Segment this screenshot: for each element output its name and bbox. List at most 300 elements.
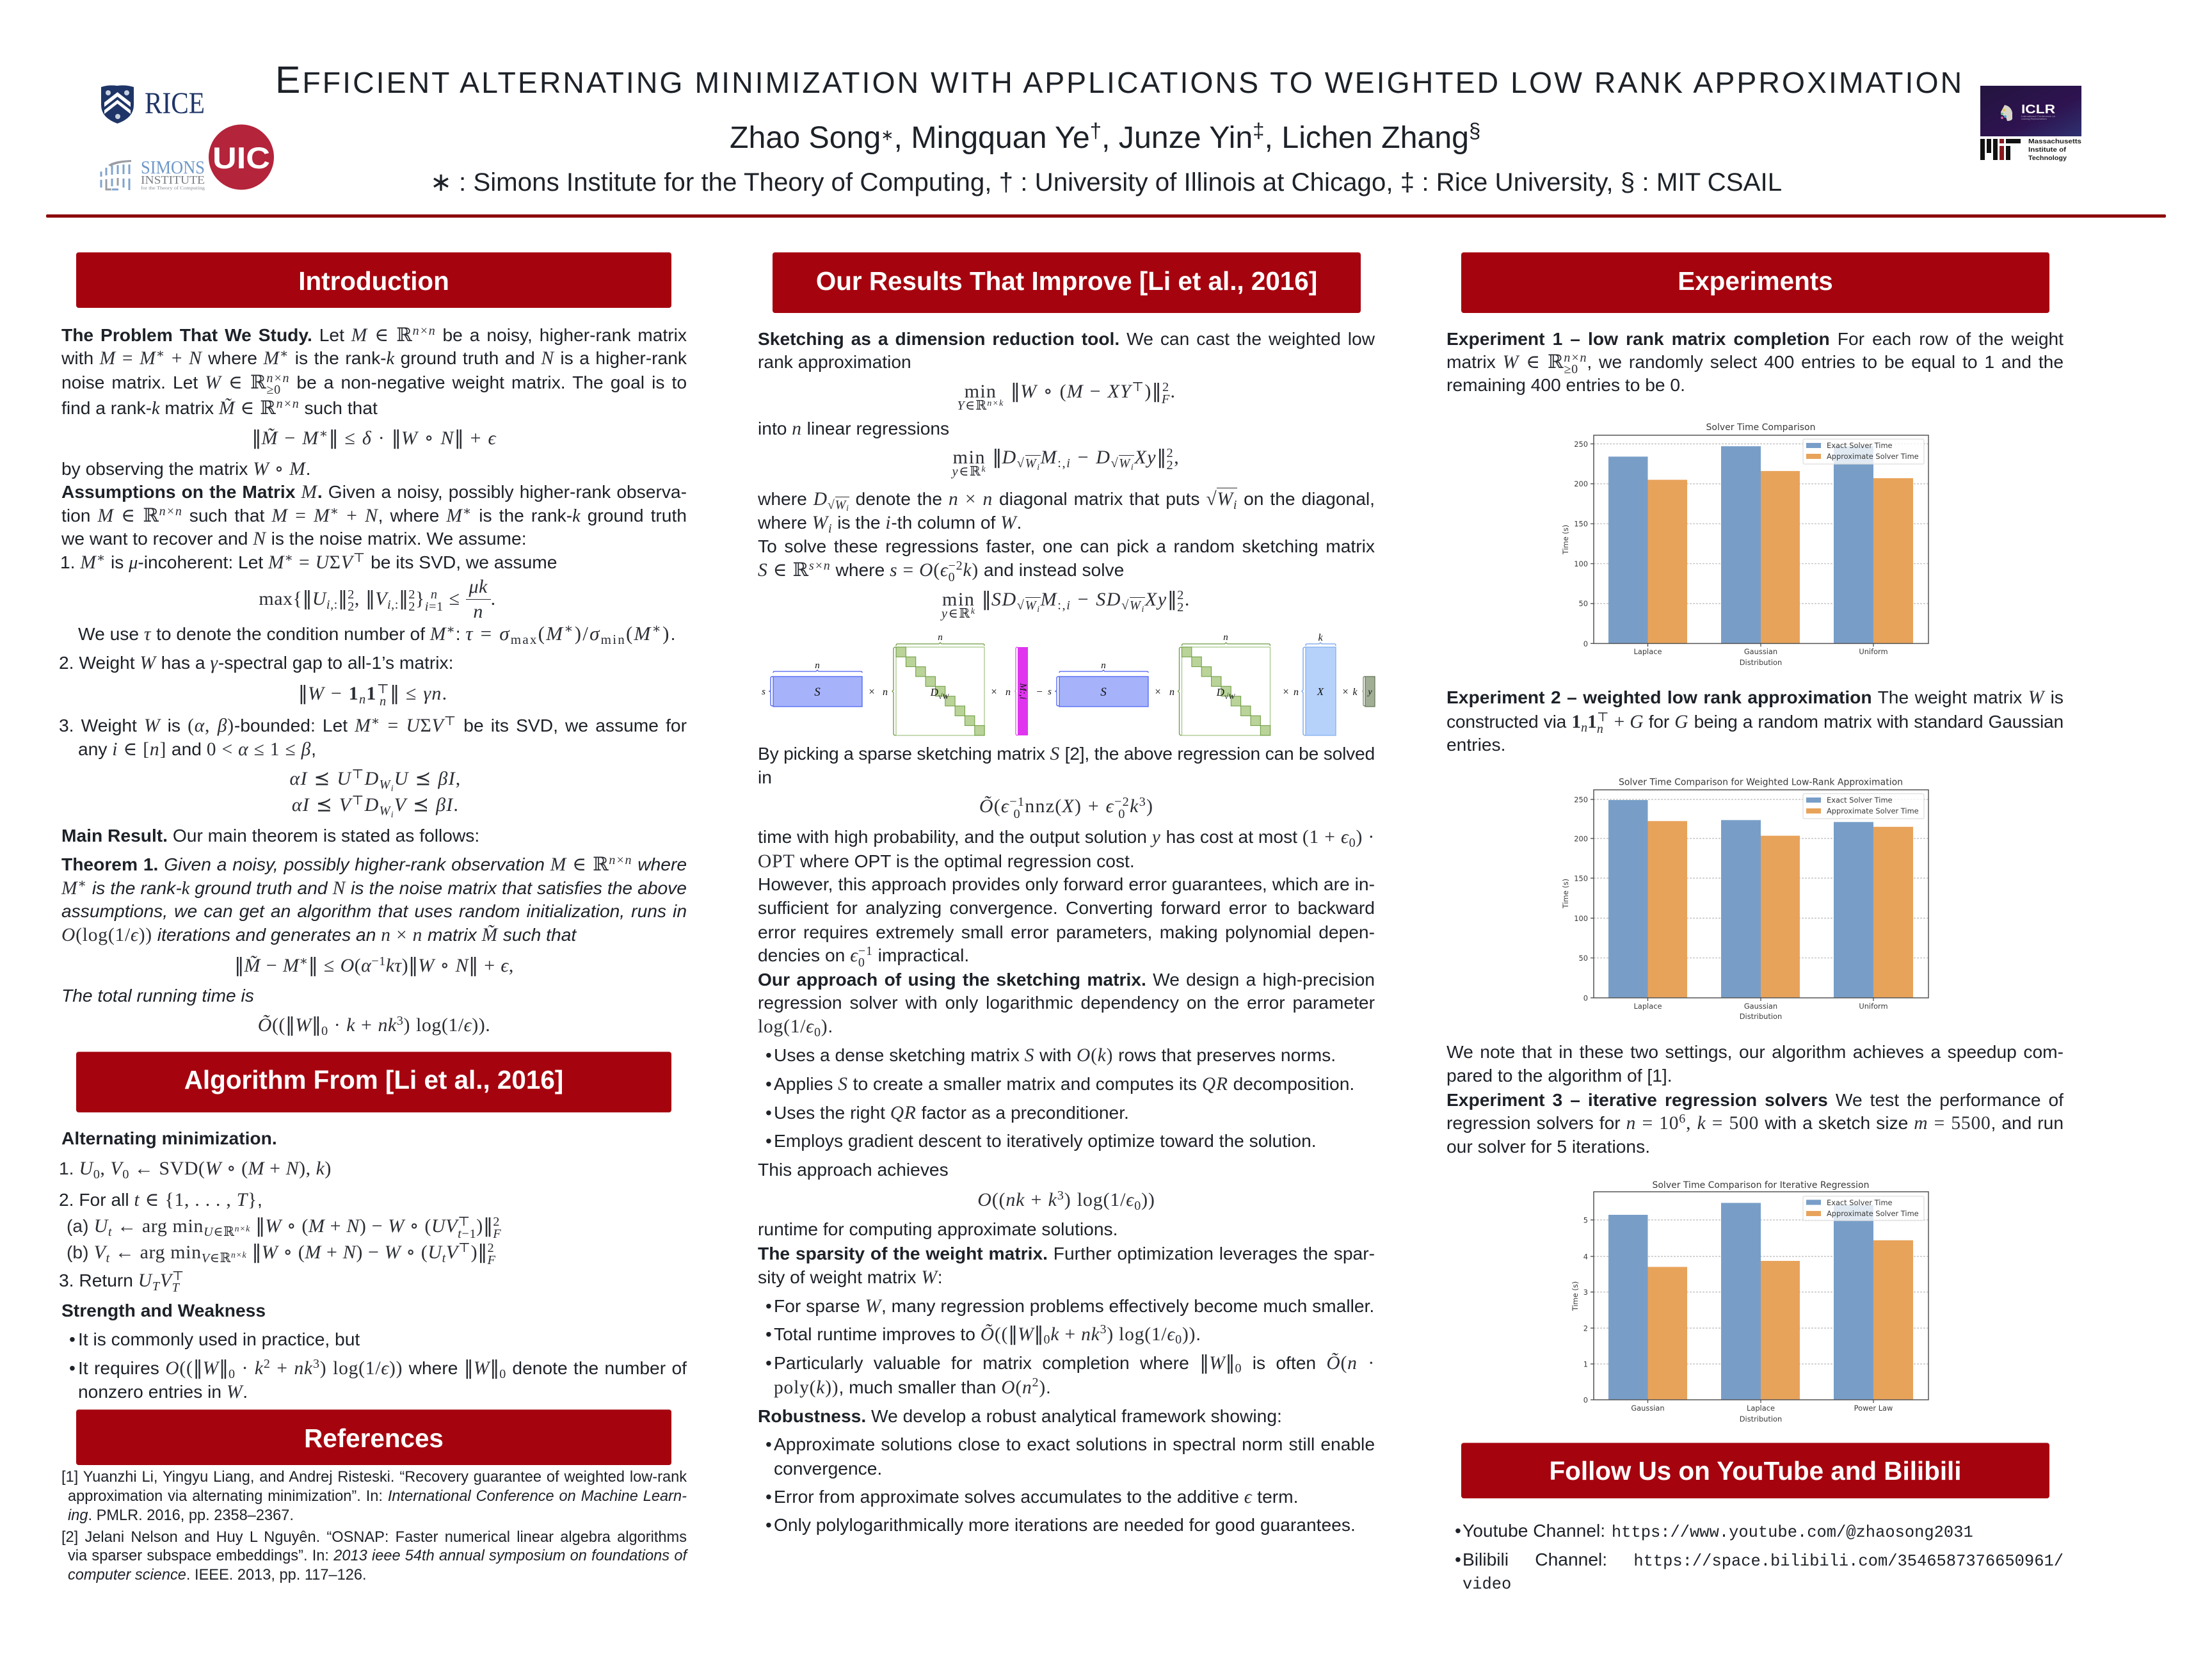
matrix X: × [1342, 685, 1349, 698]
y axis labels [1583, 1216, 1873, 1404]
algorithm steps: T [172, 1281, 180, 1295]
algorithm steps: 2 [493, 1215, 500, 1229]
y axis labels: 5 [1583, 1216, 1588, 1225]
y axis labels: 0 [1583, 639, 1588, 648]
y axis labels: 200 [1574, 479, 1588, 488]
list item 3: bounded weight: any i ∈ [n] and 0 < α ≤ 1 ≤ β, [78, 739, 316, 760]
text block: our approach: • [765, 1073, 772, 1094]
y axis labels [1574, 440, 1873, 648]
references list: [1] Yuanzhi Li, Yingyu Liang, and Andrej Risteski. “Recovery guarantee of weighted low-rank [61, 1469, 687, 1486]
matrix D left: n [938, 632, 943, 643]
text block: our approach [758, 969, 1375, 1239]
y axis labels: 250 [1574, 440, 1588, 449]
text block: the problem that we study [61, 324, 687, 479]
text block: experiment 2 [1447, 687, 2064, 755]
list item 3: bounded weight [59, 714, 687, 820]
text block: the problem that we study: by observing the matrix W ∘ M. [61, 458, 310, 479]
y axis labels: 1 [1583, 1359, 1588, 1368]
algorithm steps: Alternating minimization. [61, 1128, 277, 1148]
text block: speedup note and experiment 3: Experiment 3 – iterative regression solvers We test the performance of [1447, 1089, 2064, 1110]
y axis labels [1574, 795, 1873, 1002]
matrix D left: D [931, 686, 938, 698]
x axis labels: Gaussian [1744, 647, 1777, 656]
matrix D right: × [1283, 685, 1289, 698]
x axis labels: Laplace [1634, 647, 1662, 656]
list item 1: incoherence: i=1 [425, 600, 444, 614]
matrix X: k [1352, 687, 1358, 698]
text block: robustness: • [765, 1486, 772, 1507]
x axis labels [1631, 1404, 1893, 1423]
text block: sparse sketching solution: −2 [1114, 795, 1130, 809]
text block: forward error limitation: 0 [858, 956, 865, 970]
text block: experiment 2: constructed via 1n1 + G for G being a random matrix with standard Gaussian [1447, 711, 2064, 735]
text block: speedup note and experiment 3 [1447, 1041, 2064, 1157]
text block: sketching as a dimension reduction tool: y∈ℝk [952, 465, 986, 479]
matrix S left [762, 661, 888, 707]
text block: the problem that we study: noise matrix. Let W ∈ ℝ be a non-negative weight matrix. The goal is to [61, 372, 687, 393]
section header: Follow Us: Follow Us on YouTube and Bilibili [1549, 1456, 1961, 1486]
y axis labels: 200 [1574, 835, 1588, 844]
chart: iterative regression comparison [1571, 1180, 1929, 1423]
text block: experiment 2: entries. [1447, 734, 1505, 755]
theorem 1: O(log(1/ϵ)) iterations and generates an n × n matrix M̃ such that [61, 924, 576, 945]
logo: UIC [209, 124, 274, 189]
text block: sparsity of the weight matrix: Particularly valuable for matrix completion where ‖W‖0 is often Õ(n · [774, 1352, 1375, 1375]
plot frame [1594, 435, 1928, 643]
text block: our approach: Uses the right QR factor as a preconditioner. [774, 1102, 1129, 1123]
text block: sketching as a dimension reduction tool: 2 [1166, 446, 1174, 460]
text block: the problem that we study: ≥0 [266, 383, 281, 397]
algorithm steps: 1. U0, V0 ← SVD(W ∘ (M + N), k) [59, 1158, 332, 1182]
text block: assumptions on the matrix: we want to recover and N is the noise matrix. We assume: [61, 528, 527, 549]
text block: sketching as a dimension reduction tool: Y∈ℝn×k [957, 399, 1004, 413]
text block: sparsity of the weight matrix: sity of weight matrix W: [758, 1267, 943, 1288]
y axis labels: 0 [1583, 993, 1588, 1002]
list item 1: incoherence: μk [469, 576, 488, 597]
y axis labels: 100 [1574, 559, 1588, 568]
legend: Approximate Solver Time [1827, 1209, 1919, 1218]
bars [1608, 446, 1913, 643]
matrix D right: n [1223, 632, 1228, 643]
matrix D left: √W [938, 692, 949, 701]
logo: MIT: Technology [2028, 154, 2067, 162]
text block: the problem that we study: find a rank-k matrix M̃ ∈ ℝn×n such that [61, 397, 378, 419]
x axis labels: Uniform [1859, 647, 1888, 656]
legend: Approximate Solver Time [1827, 806, 1919, 815]
matrix X [1302, 632, 1358, 735]
text block: experiment 2: n [1597, 722, 1603, 736]
text block: forward error limitation: −1 [858, 944, 873, 958]
y axis labels: 150 [1574, 874, 1588, 883]
theorem 1: Õ((‖W‖0 · k + nk3) log(1/ϵ)). [258, 1014, 490, 1038]
text block: our approach: This approach achieves [758, 1159, 949, 1180]
section header: Our Results [773, 252, 1361, 313]
vector M column: M:,i [1018, 682, 1028, 700]
theorem 1: The total running time is [61, 985, 254, 1006]
matrix S right: n [1169, 687, 1174, 698]
text block: main result: Main Result. Our main theorem is stated as follows: [61, 825, 479, 846]
section header: Our Results: Our Results That Improve [Li et al., 2016] [816, 266, 1317, 296]
legend: Exact Solver Time [1827, 441, 1893, 450]
grid [1594, 799, 1928, 958]
x axis labels: Distribution [1740, 1415, 1782, 1423]
text block: sketching as a dimension reduction tool: min [965, 381, 997, 402]
theorem 1: assumptions, we can get an algorithm that uses random initialization, runs in [61, 901, 687, 921]
algorithm steps: 2. For all t ∈ {1, . . . , T}, [59, 1189, 262, 1210]
logo: Simons Institute: INSTITUTE [141, 173, 205, 186]
text block: sparsity of the weight matrix [758, 1243, 1375, 1398]
text block: sparse sketching solution: time with high probability, and the output solution y has cost at most (1 + ϵ0) · [758, 826, 1375, 850]
y axis labels: 100 [1574, 914, 1588, 923]
text block: experiment 1 [1447, 328, 2064, 395]
vector M column: − [1036, 685, 1043, 698]
text block: sparse sketching solution: 0 [1014, 807, 1021, 821]
text block: sparsity of the weight matrix: poly(k)), much smaller than O(n2). [774, 1375, 1051, 1398]
list item 1: incoherence: 2 [348, 600, 355, 614]
logo: ICLR: ICLR [2021, 103, 2055, 116]
y axis labels: 4 [1583, 1252, 1588, 1261]
text block: robustness: • [765, 1434, 772, 1454]
list item 1: incoherence: 2 [348, 588, 355, 602]
legend [1803, 1196, 1924, 1221]
legend: Exact Solver Time [1827, 796, 1893, 805]
x axis labels: Distribution [1740, 658, 1782, 667]
diagram: sketched regression matrices [762, 632, 1375, 736]
text block: sparsity of the weight matrix: • [765, 1324, 772, 1344]
text block: assumptions on the matrix [61, 481, 687, 549]
y axis labels: 50 [1578, 599, 1588, 608]
channel links [1455, 1520, 2064, 1594]
matrix S left: × [869, 685, 875, 698]
plot frame [1594, 790, 1928, 998]
matrix D right [1178, 632, 1299, 735]
text block: robustness [758, 1406, 1375, 1535]
list item 2: spectral gap: ⊤ [377, 682, 390, 696]
text block: speedup note and experiment 3: our solver for 5 iterations. [1447, 1136, 1650, 1157]
matrix S right [1055, 661, 1174, 707]
text block: sketching as a dimension reduction tool: 0 [949, 570, 955, 584]
text block: the problem that we study: The Problem That We Study. Let M ∈ ℝn×n be a noisy, higher-rank matrix [61, 324, 687, 346]
text block: sketching as a dimension reduction tool: F [1162, 392, 1170, 406]
list item 1: incoherence: n [473, 601, 483, 622]
x axis labels: Gaussian [1744, 1002, 1777, 1011]
text block: sparse sketching solution: Õ(ϵ nnz(X) + ϵ k3) [979, 795, 1153, 817]
logo: Rice University [101, 85, 205, 124]
algorithm steps: (a) Ut ← arg minU∈ℝn×k ‖W ∘ (M + N) − W ∘ (UV )‖ [67, 1215, 493, 1239]
matrix X: X [1317, 685, 1324, 698]
text block: speedup note and experiment 3: pared to the algorithm of [1]. [1447, 1065, 1672, 1086]
list item 1: incoherence: max{‖Ui,:‖ , ‖Vi,:‖ } ≤ . [259, 588, 496, 612]
vector M column [1015, 647, 1052, 735]
logo: ICLR: Learning Representations [2021, 117, 2047, 120]
text block: experiment 1: ≥0 [1564, 362, 1578, 376]
list item 3: bounded weight: αI ⪯ U⊤DWiU ⪯ βI, [290, 767, 461, 794]
text block: experiment 2: Experiment 2 – weighted low rank approximation The weight matrix W is [1447, 687, 2064, 708]
algorithm steps: t−1 [458, 1227, 476, 1241]
matrix D left: n [1006, 687, 1011, 698]
text block: sparse sketching solution: By picking a sparse sketching matrix S [2], the above regression can be solved [758, 743, 1375, 764]
algorithm steps: 3. Return UTV [59, 1270, 172, 1294]
text block: assumptions on the matrix: Assumptions on the Matrix M. Given a noisy, possibly higher-rank observa- [61, 481, 687, 502]
text block: sketching as a dimension reduction tool: Sketching as a dimension reduction tool. We can cast the weighted low [758, 328, 1375, 349]
text block: sketching as a dimension reduction tool: ‖W ∘ (M − XY⊤)‖ . [1011, 380, 1176, 403]
algorithm steps: ⊤ [458, 1215, 470, 1229]
chart title: Solver Time Comparison for Iterative Regression [1652, 1180, 1870, 1190]
logo: MIT: Massachusetts [2028, 138, 2081, 145]
references list: ing. PMLR. 2016, pp. 2358–2367. [68, 1507, 294, 1524]
text block: strength and weakness: • [69, 1358, 76, 1378]
y axis labels: 3 [1583, 1288, 1588, 1297]
references list: approximation via alternating minimization”. In: International Conference on Machine Learn- [68, 1488, 687, 1505]
text block: sketching as a dimension reduction tool: where Wi is the i-th column of W. [758, 512, 1022, 536]
text block: sketching as a dimension reduction tool: into n linear regressions [758, 418, 949, 439]
algorithm steps: ⊤ [172, 1269, 184, 1283]
algorithm steps: 2 [487, 1241, 494, 1255]
x axis labels: Laplace [1747, 1404, 1775, 1413]
y axis title: Time (s) [1561, 525, 1570, 555]
matrix S right: n [1101, 661, 1106, 671]
text block: forward error limitation: However, this approach provides only forward error guarantees, which are in- [758, 874, 1375, 894]
text block: sparsity of the weight matrix: For sparse W, many regression problems effectively become much smaller. [774, 1295, 1374, 1316]
text block: our approach: Our approach of using the sketching matrix. We design a high-precision [758, 969, 1375, 990]
text block: our approach: log(1/ϵ0). [758, 1016, 833, 1039]
text block: sketching as a dimension reduction tool: ‖SD√WiM:,i − SD√WiXy‖ . [982, 588, 1190, 614]
text block: sketching as a dimension reduction tool: min [942, 589, 975, 610]
legend: Approximate Solver Time [1827, 452, 1919, 461]
algorithm steps: F [487, 1253, 496, 1267]
text block: strength and weakness: It is commonly used in practice, but [78, 1329, 360, 1349]
text block: strength and weakness [61, 1300, 687, 1402]
grid [1594, 444, 1928, 604]
x axis labels [1634, 1002, 1888, 1021]
vector M column: s [1048, 687, 1052, 697]
x axis labels: Distribution [1740, 1012, 1782, 1021]
text block: experiment 1: remaining 400 entries to be 0. [1447, 374, 1685, 395]
list item 1: incoherence: 2 [408, 588, 415, 602]
theorem 1 [61, 853, 687, 1038]
text block: the problem that we study: ‖M̃ − M∗‖ ≤ δ · ‖W ∘ N‖ + ϵ [252, 427, 497, 449]
text block: the problem that we study: n×n [266, 371, 289, 385]
text block: sketching as a dimension reduction tool [758, 328, 1375, 621]
text: • [1455, 1549, 1461, 1569]
y axis labels: 0 [1583, 1395, 1588, 1404]
list item 1: incoherence: We use τ to denote the condition number of M∗: τ = σmax(M∗)/σmin(M∗). [78, 621, 675, 647]
vector y [1363, 677, 1375, 707]
text block: our approach: regression solver with only logarithmic dependency on the error parameter [758, 992, 1375, 1013]
text block: sketching as a dimension reduction tool: y∈ℝk [942, 607, 976, 621]
section header: Experiments: Experiments [1678, 266, 1833, 296]
algorithm steps [59, 1128, 501, 1295]
matrix S left: n [883, 687, 888, 698]
list item 1: incoherence: n [431, 588, 438, 602]
y axis labels: 50 [1578, 954, 1588, 963]
text block: sketching as a dimension reduction tool: −2 [949, 559, 963, 573]
list item 2: spectral gap: n [380, 694, 387, 709]
text block: sketching as a dimension reduction tool: 2 [1177, 600, 1185, 614]
logo: MIT: Institute of [2028, 146, 2067, 154]
list item 2: spectral gap: 2. Weight W has a γ-spectral gap to all-1’s matrix: [59, 652, 453, 673]
text block: sketching as a dimension reduction tool: rank approximation [758, 351, 911, 372]
y axis labels: 150 [1574, 520, 1588, 529]
text block: sketching as a dimension reduction tool: ‖D√WiM:,i − D√WiXy‖ , [992, 446, 1180, 472]
text block: strength and weakness: It requires O((‖W‖0 · k2 + nk3) log(1/ϵ)) where ‖W‖0 denote the number of [78, 1357, 687, 1381]
authors: Zhao Song∗, Mingquan Ye†, Junze Yin‡, Lichen Zhang§ [730, 118, 1480, 155]
text block: forward error limitation [758, 874, 1375, 970]
x axis labels [1634, 647, 1888, 667]
matrix S right: S [1100, 685, 1107, 699]
legend [1803, 439, 1924, 464]
x axis labels: Uniform [1859, 1002, 1888, 1011]
text block: sketching as a dimension reduction tool: 2 [1177, 588, 1185, 602]
text block: our approach: • [765, 1045, 772, 1065]
text block: sparsity of the weight matrix: • [765, 1352, 772, 1372]
channel links: Bilibili Channel: https://space.bilibili.com/3546587376650961/ [1463, 1549, 2064, 1571]
matrix S left: n [815, 661, 820, 671]
text block: experiment 1: n×n [1564, 351, 1587, 365]
section header: Algorithm [76, 1052, 671, 1112]
text block: our approach: Applies S to create a smaller matrix and computes its QR decomposition. [774, 1073, 1354, 1094]
matrix D left: × [991, 685, 997, 698]
text block: sketching as a dimension reduction tool: To solve these regressions faster, one can pick a random sketching matrix [758, 536, 1375, 556]
references list: via sparser subspace embeddings”. In: 2013 ieee 54th annual symposium on foundations of [68, 1548, 687, 1564]
theorem 1: Theorem 1. Given a noisy, possibly higher-rank observation M ∈ ℝn×n where [61, 853, 687, 875]
references list [61, 1469, 689, 1583]
logo: UIC: UIC [212, 141, 270, 175]
text block: robustness: Robustness. We develop a robust analytical framework showing: [758, 1406, 1282, 1426]
text block: our approach: Uses a dense sketching matrix S with O(k) rows that preserves norms. [774, 1045, 1336, 1066]
y axis labels: 2 [1583, 1324, 1588, 1333]
logo: MIT [1980, 138, 2081, 162]
text block: our approach: runtime for computing approximate solutions. [758, 1219, 1118, 1239]
text block: robustness: Only polylogarithmically more iterations are needed for good guarantees. [774, 1514, 1356, 1535]
text block: speedup note and experiment 3: regression solvers for n = 106, k = 500 with a sketch size m = 5500, and run [1447, 1112, 2064, 1134]
text block: sparse sketching solution [758, 743, 1375, 872]
x axis labels: Laplace [1634, 1002, 1662, 1011]
text block: sparse sketching solution: OPT where OPT is the optimal regression cost. [758, 851, 1135, 872]
text block: sparse sketching solution: in [758, 767, 772, 787]
list item 1: incoherence [60, 551, 675, 647]
matrix D right: √W [1224, 692, 1235, 701]
section header: References: References [304, 1423, 444, 1453]
text block: robustness: Approximate solutions close to exact solutions in spectral norm still enable [774, 1434, 1375, 1454]
text block: our approach: • [765, 1130, 772, 1151]
text block: the problem that we study: with M = M∗ + N where M∗ is the rank-k ground truth and N is a higher-rank [61, 347, 687, 369]
section header: Algorithm: Algorithm From [Li et al., 2016] [184, 1065, 563, 1094]
text block: sparsity of the weight matrix: The sparsity of the weight matrix. Further optimization leverages the spar- [758, 1243, 1375, 1263]
matrix X: k [1318, 632, 1323, 643]
logo: Simons Institute [100, 157, 205, 191]
matrix D right: n [1294, 687, 1299, 698]
logo: ICLR [1980, 86, 2081, 136]
theorem 1: ‖M̃ − M∗‖ ≤ O(α−1kτ)‖W ∘ N‖ + ϵ, [234, 954, 514, 977]
text block: robustness: Error from approximate solves accumulates to the additive ϵ term. [774, 1486, 1298, 1507]
text block: robustness: convergence. [774, 1458, 882, 1479]
matrix S right: × [1155, 685, 1161, 698]
text block: our approach: O((nk + k3) log(1/ϵ0)) [977, 1189, 1155, 1213]
text block: strength and weakness: • [69, 1329, 76, 1349]
list item 1: incoherence: 2 [408, 600, 415, 614]
matrix S left: s [762, 687, 765, 697]
vector y: y [1366, 687, 1372, 697]
text: • [1455, 1520, 1461, 1541]
text block: sketching as a dimension reduction tool: min [953, 447, 986, 468]
bars [1608, 800, 1913, 998]
text block: sketching as a dimension reduction tool: 2 [1166, 458, 1174, 472]
channel links: video [1463, 1575, 1511, 1594]
list item 2: spectral gap: ‖W − 1n1 ‖ ≤ γn. [298, 682, 447, 707]
text block: our approach: Employs gradient descent to iteratively optimize toward the solution. [774, 1130, 1317, 1151]
matrix S left: S [814, 685, 821, 699]
chart: solver time comparison [1561, 422, 1929, 667]
text block: strength and weakness: nonzero entries in W. [78, 1381, 248, 1402]
grid [1594, 1220, 1928, 1364]
chart title: Solver Time Comparison [1706, 422, 1815, 433]
list item 3: bounded weight: αI ⪯ V⊤DWiV ⪯ βI. [292, 794, 459, 820]
text block: strength and weakness: Strength and Weakness [61, 1300, 266, 1320]
section header: Experiments [1461, 252, 2049, 313]
logo: Simons Institute: for the Theory of Computing [141, 186, 205, 191]
bars [1608, 1203, 1913, 1400]
algorithm steps: F [493, 1227, 501, 1241]
channel links: Youtube Channel: https://www.youtube.com/@zhaosong2031 [1463, 1520, 1973, 1542]
references list: [2] Jelani Nelson and Huy L Nguyên. “OSNAP: Faster numerical linear algebra algorithms [61, 1529, 687, 1546]
text block: sketching as a dimension reduction tool: where D√Wi denote the n × n diagonal matrix that puts √Wi on the diagonal, [758, 488, 1375, 513]
header title: EFFICIENT ALTERNATING MINIMIZATION WITH APPLICATIONS TO WEIGHTED LOW RANK APPROXIMATION [275, 59, 1964, 101]
matrix D right: D [1217, 686, 1224, 698]
text block: sparsity of the weight matrix: • [765, 1295, 772, 1316]
algorithm steps: (b) Vt ← arg minV∈ℝn×k ‖W ∘ (M + N) − W ∘ (UtV⊤)‖ [67, 1241, 487, 1265]
text block: experiment 1: matrix W ∈ ℝ , we randomly select 400 entries to be equal to 1 and the [1447, 351, 2064, 373]
list item 1: incoherence: 1. M∗ is μ-incoherent: Let M∗ = UΣV⊤ be its SVD, we assume [60, 551, 557, 573]
text block: speedup note and experiment 3: We note that in these two settings, our algorithm achieves a speedup com- [1447, 1041, 2064, 1062]
matrix D left [892, 632, 1011, 735]
text block: sparsity of the weight matrix: Total runtime improves to Õ((‖W‖0k + nk3) log(1/ϵ0)). [774, 1322, 1201, 1347]
header rule [46, 214, 2166, 218]
text block: experiment 1: Experiment 1 – low rank matrix completion For each row of the weight [1447, 328, 2064, 349]
y axis labels: 250 [1574, 795, 1588, 804]
section header: Introduction: Introduction [298, 266, 449, 296]
logo: ICLR: International Conference on [2021, 115, 2055, 118]
text block: forward error limitation: error requires extremely small error parameters, making polynomial depen- [758, 922, 1375, 942]
references list: computer science. IEEE. 2013, pp. 117–126. [68, 1567, 366, 1583]
text block: experiment 2: ⊤ [1597, 710, 1609, 725]
legend: Exact Solver Time [1827, 1198, 1893, 1207]
text block: sketching as a dimension reduction tool: S ∈ ℝs×n where s = O(ϵ k) and instead solve [758, 559, 1124, 581]
list item 3: bounded weight: 3. Weight W is (α, β)-bounded: Let M∗ = UΣV⊤ be its SVD, we assume for [59, 714, 687, 736]
section header: Introduction [76, 252, 671, 308]
section header: References [76, 1409, 671, 1465]
chart title: Solver Time Comparison for Weighted Low-Rank Approximation [1619, 777, 1903, 787]
list item 2: spectral gap [59, 652, 453, 709]
y axis title: Time (s) [1571, 1281, 1580, 1311]
text block: forward error limitation: sufficient for analyzing convergence. Converting forward error to backward [758, 897, 1375, 918]
plot frame [1594, 1192, 1928, 1400]
section header: Follow Us [1461, 1443, 2049, 1498]
legend [1803, 794, 1924, 819]
theorem 1: M∗ is the rank-k ground truth and N is the noise matrix that satisfies the above [61, 877, 687, 899]
x axis labels: Gaussian [1631, 1404, 1665, 1413]
text block: our approach: • [765, 1102, 772, 1123]
text block: sparse sketching solution: 0 [1118, 807, 1126, 821]
text block: sparse sketching solution: −1 [1009, 795, 1025, 809]
affiliations: ∗ : Simons Institute for the Theory of Computing, † : University of Illinois at Chicago, ‡ : Rice University, § : MIT CSAIL [430, 168, 1782, 196]
text block: forward error limitation: dencies on ϵ impractical. [758, 945, 969, 966]
chart: weighted low-rank comparison [1561, 777, 1929, 1021]
x axis labels: Power Law [1854, 1404, 1893, 1413]
text block: sketching as a dimension reduction tool: 2 [1162, 380, 1169, 394]
text block: robustness: • [765, 1514, 772, 1535]
text block: assumptions on the matrix: tion M ∈ ℝn×n such that M = M∗ + N, where M∗ is the rank-k ground truth [61, 504, 687, 526]
